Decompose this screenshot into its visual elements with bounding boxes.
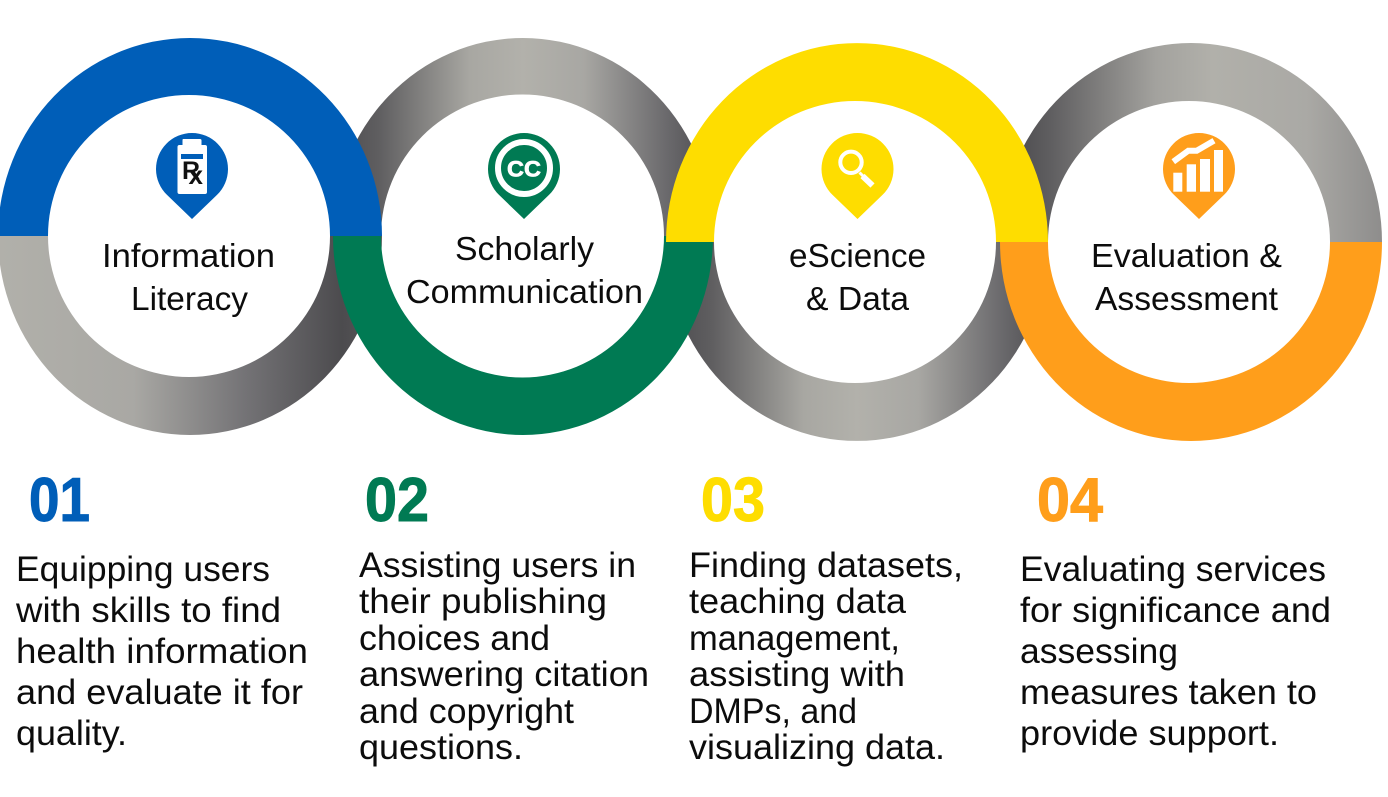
text block: evaluation and assessment description: assessing xyxy=(1020,632,1178,671)
icon: creative commons pin xyxy=(488,133,560,219)
text block: scholarly communication description: Assisting users in xyxy=(359,546,636,585)
text block: eScience and data description xyxy=(689,546,963,767)
icon: creative commons pin: CC xyxy=(507,156,541,182)
icon: magnifying glass pin xyxy=(822,133,894,219)
number 02: 02 xyxy=(365,466,429,535)
heading: Information Literacy xyxy=(102,237,275,317)
text block: information literacy description: health information xyxy=(16,632,308,671)
heading: Scholarly Communication: Communication xyxy=(406,273,643,310)
icon: prescription bottle pin xyxy=(156,133,228,219)
number 04: 04 xyxy=(1037,466,1103,535)
text block: eScience and data description: teaching data xyxy=(689,582,907,621)
text block: information literacy description: and evaluate it for xyxy=(16,673,303,712)
ring 3 upper yellow arc xyxy=(666,43,1048,242)
text block: eScience and data description: management, xyxy=(689,619,900,658)
icon: prescription bottle pin: R xyxy=(182,157,200,185)
icon: prescription bottle pin: x xyxy=(188,160,204,190)
ring 1 lower grey arc xyxy=(0,236,382,435)
text block: scholarly communication description: questions. xyxy=(359,728,523,767)
text block: scholarly communication description: choices and xyxy=(359,619,550,658)
icon: rising bar chart pin xyxy=(1163,133,1235,219)
text block: eScience and data description: DMPs, and xyxy=(689,692,857,731)
text block: evaluation and assessment description: provide support. xyxy=(1020,714,1279,753)
text block: eScience and data description: assisting with xyxy=(689,655,905,694)
ring 3 lower grey arc xyxy=(666,242,1048,441)
number 03: 03 xyxy=(701,466,765,535)
text block: scholarly communication description: their publishing xyxy=(359,582,607,621)
ring 4 upper grey arc xyxy=(1000,43,1382,242)
ring 4 lower orange arc xyxy=(1000,242,1382,441)
heading: Evaluation & Assessment: Evaluation & xyxy=(1091,237,1282,274)
text block: evaluation and assessment description xyxy=(1020,550,1331,753)
text block: information literacy description: quality. xyxy=(16,714,127,753)
heading: Information Literacy: Information xyxy=(102,237,275,274)
text block: evaluation and assessment description: Evaluating services xyxy=(1020,550,1326,589)
heading: Scholarly Communication xyxy=(406,230,643,310)
text block: scholarly communication description: and copyright xyxy=(359,692,574,731)
ring 2 upper grey arc xyxy=(333,38,713,236)
text block: scholarly communication description: answering citation xyxy=(359,655,649,694)
text block: eScience and data description: Finding datasets, xyxy=(689,546,963,585)
heading: eScience & Data: eScience xyxy=(789,237,926,274)
heading: Scholarly Communication: Scholarly xyxy=(455,230,594,267)
heading: Evaluation & Assessment: Assessment xyxy=(1095,280,1278,317)
ring 2 lower green arc xyxy=(333,236,713,435)
heading: Evaluation & Assessment xyxy=(1091,237,1282,317)
text block: information literacy description: Equipping users xyxy=(16,550,270,589)
text block: information literacy description xyxy=(15,550,308,753)
text block: evaluation and assessment description: for significance and xyxy=(1020,591,1331,630)
ring 1 upper blue arc xyxy=(0,38,382,236)
text block: evaluation and assessment description: measures taken to xyxy=(1020,673,1317,712)
heading: eScience & Data xyxy=(789,237,926,317)
text block: information literacy description: with skills to find xyxy=(15,591,281,630)
text block: scholarly communication description xyxy=(359,546,649,767)
heading: Information Literacy: Literacy xyxy=(131,280,248,317)
text block: eScience and data description: visualizing data. xyxy=(689,728,945,767)
number 01: 01 xyxy=(29,466,90,535)
heading: eScience & Data: & Data xyxy=(806,280,910,317)
